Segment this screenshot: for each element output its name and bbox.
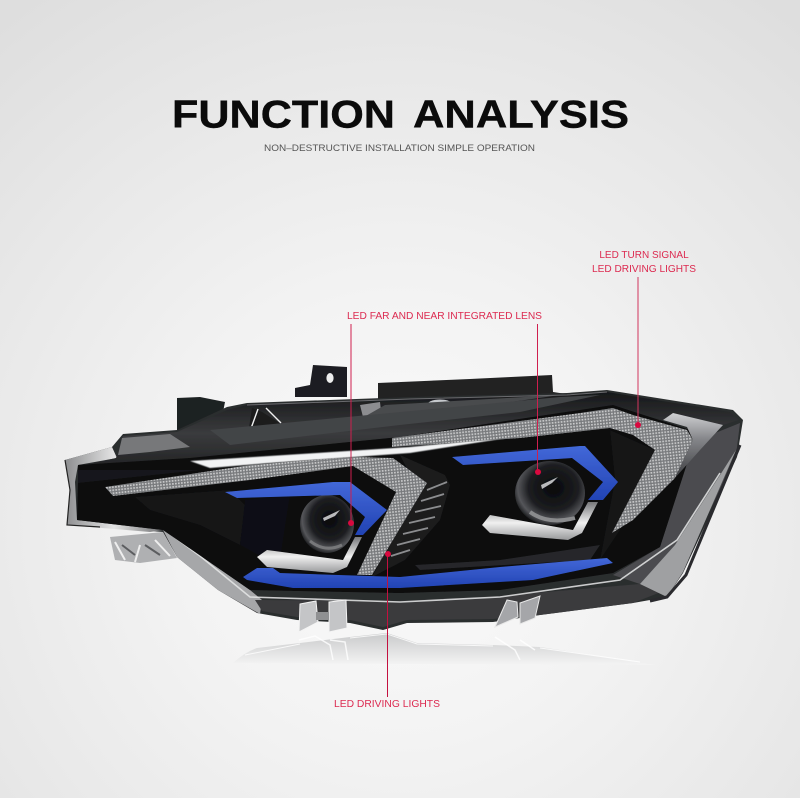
left clips [110,532,177,563]
bottom clips [299,596,540,632]
title [172,94,629,136]
blue trim right [452,446,618,500]
left lens [300,495,354,553]
silver bezel left [257,537,362,573]
subtitle: NON–DESTRUCTIVE INSTALLATION SIMPLE OPERATION [264,143,535,154]
outer housing shape [65,390,743,630]
title: FUNCTION [172,94,395,136]
headlight [65,365,743,632]
title: ANALYSIS [413,94,629,136]
left tip dark edge [65,460,100,527]
mounting brackets [177,365,573,430]
callout: LED far and near integrated lens: LED FAR AND NEAR INTEGRATED LENS [347,311,542,322]
carbon-ribbed module [372,455,450,577]
lower lens band [255,584,666,627]
LED driving strip left [105,457,427,575]
LED strip right [392,408,693,533]
black interior [77,405,694,593]
upper housing [77,392,738,467]
right dark edge [650,445,740,601]
white light bar [190,436,520,468]
callout: LED turn signal / driving lights: LED TURN SIGNAL [599,250,689,261]
right lens [515,461,585,525]
callout: LED turn signal / driving lights [592,250,696,428]
blue trim left [225,482,387,535]
left glass tip [65,447,163,532]
callout: LED far and near integrated lens [347,311,542,526]
callout: LED driving lights [334,551,440,710]
blue trim bottom [243,558,613,588]
floor reflection [233,633,657,665]
lower left glass rim [163,530,262,614]
right clear glass rim [640,450,736,597]
glass rim highlights [165,473,720,602]
right reflection highlight [663,413,723,478]
silver bezel right [482,502,598,540]
upper housing details [118,392,607,455]
callout: LED driving lights: LED DRIVING LIGHTS [334,699,440,710]
dark recess panels [78,430,655,570]
right glass panel [613,423,740,590]
callout: LED turn signal / driving lights: LED DRIVING LIGHTS [592,264,696,275]
